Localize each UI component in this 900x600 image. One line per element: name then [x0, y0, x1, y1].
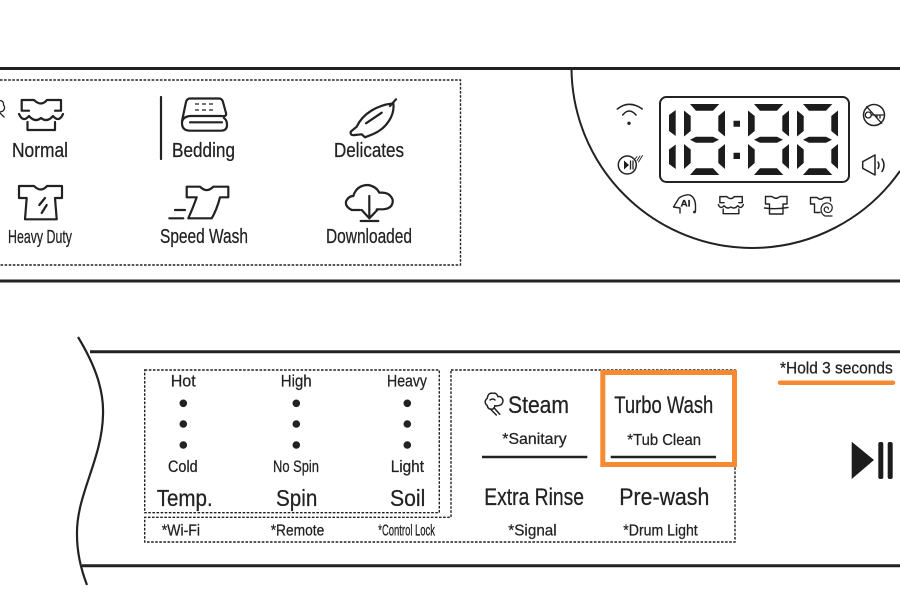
button: Turbo Wash highlighted: *Tub Clean	[627, 432, 701, 449]
button: Pre-wash: *Drum Light	[623, 522, 698, 539]
icon: AI wash: AI	[680, 198, 690, 208]
icon: small shirt wash	[718, 197, 743, 214]
button: Extra Rinse: *Signal	[508, 522, 557, 539]
button: Pre-wash: Pre-wash	[619, 484, 709, 511]
display: seven segment clock	[660, 97, 849, 182]
curved panel edge	[77, 337, 103, 585]
icon: AI wash	[674, 195, 696, 213]
cycle: Bedding: Bedding	[172, 140, 235, 162]
cycle: Delicates: Delicates	[334, 140, 404, 162]
icon: remote start	[618, 156, 642, 174]
icon: steam	[485, 393, 503, 415]
digit: first eight	[684, 104, 725, 175]
digit: third eight	[797, 104, 838, 175]
panel: round display dial	[572, 69, 900, 248]
icon: small shirt rinse	[764, 196, 788, 214]
column: Spin: No Spin	[273, 458, 319, 476]
label: Control Lock: *Control Lock	[378, 522, 435, 539]
cycle: Heavy Duty	[8, 186, 72, 247]
cycle: Bedding	[172, 98, 235, 162]
column: Spin: High	[281, 373, 312, 391]
icon: speaker	[863, 155, 884, 175]
digit: leading one	[669, 110, 676, 169]
button: Turbo Wash highlighted: Turbo Wash	[614, 392, 713, 419]
column: Soil: Light	[391, 458, 424, 476]
label: Wi-Fi: *Wi-Fi	[162, 522, 200, 539]
column: Soil: Soil	[390, 485, 425, 511]
cycle: Delicates	[334, 99, 404, 162]
cycle: Speed Wash: Speed Wash	[160, 226, 248, 248]
colon	[734, 121, 740, 159]
digit: second eight	[748, 104, 789, 175]
panel: bottom button panel	[77, 337, 900, 585]
cycle: Downloaded: Downloaded	[326, 226, 412, 248]
button: Extra Rinse	[484, 484, 584, 539]
cycle: Speed Wash	[160, 187, 248, 248]
cycle: Heavy Duty: Heavy Duty	[8, 227, 72, 247]
icon: start pause	[852, 442, 893, 479]
icon: control lock	[864, 104, 884, 126]
panel: temperature spin soil box	[145, 370, 439, 513]
column: Temp.: Cold	[168, 458, 198, 476]
column: Temp.	[157, 373, 213, 511]
button: Steam	[482, 392, 587, 457]
callout: hold 3 seconds: *Hold 3 seconds	[780, 359, 893, 377]
button: Steam: *Sanitary	[502, 431, 567, 448]
panel: cycle selection dashed box	[0, 80, 460, 265]
divider: bedding bar	[160, 97, 162, 159]
button: Turbo Wash highlighted	[603, 372, 734, 464]
button: Extra Rinse: Extra Rinse	[484, 484, 584, 511]
column: Soil: Heavy	[387, 373, 428, 391]
button: Pre-wash	[619, 484, 709, 539]
panel: option buttons dashed outline	[145, 370, 735, 542]
column: Soil	[387, 373, 428, 511]
column: Spin	[273, 373, 319, 511]
column: Temp.: Temp.	[157, 485, 213, 511]
icon: small shirt spin	[810, 198, 832, 216]
cycle: Downloaded	[326, 185, 412, 248]
icon: steam fragment	[0, 100, 5, 117]
button: Steam: Steam	[508, 392, 569, 419]
label: Remote: *Remote	[271, 522, 324, 539]
cycle: Normal	[12, 100, 68, 162]
cycle: Normal: Normal	[12, 140, 68, 162]
column: Spin: Spin	[276, 485, 317, 511]
panel: top display panel	[0, 68, 900, 281]
column: Temp.: Hot	[171, 373, 196, 391]
icon: wi-fi	[617, 104, 642, 125]
